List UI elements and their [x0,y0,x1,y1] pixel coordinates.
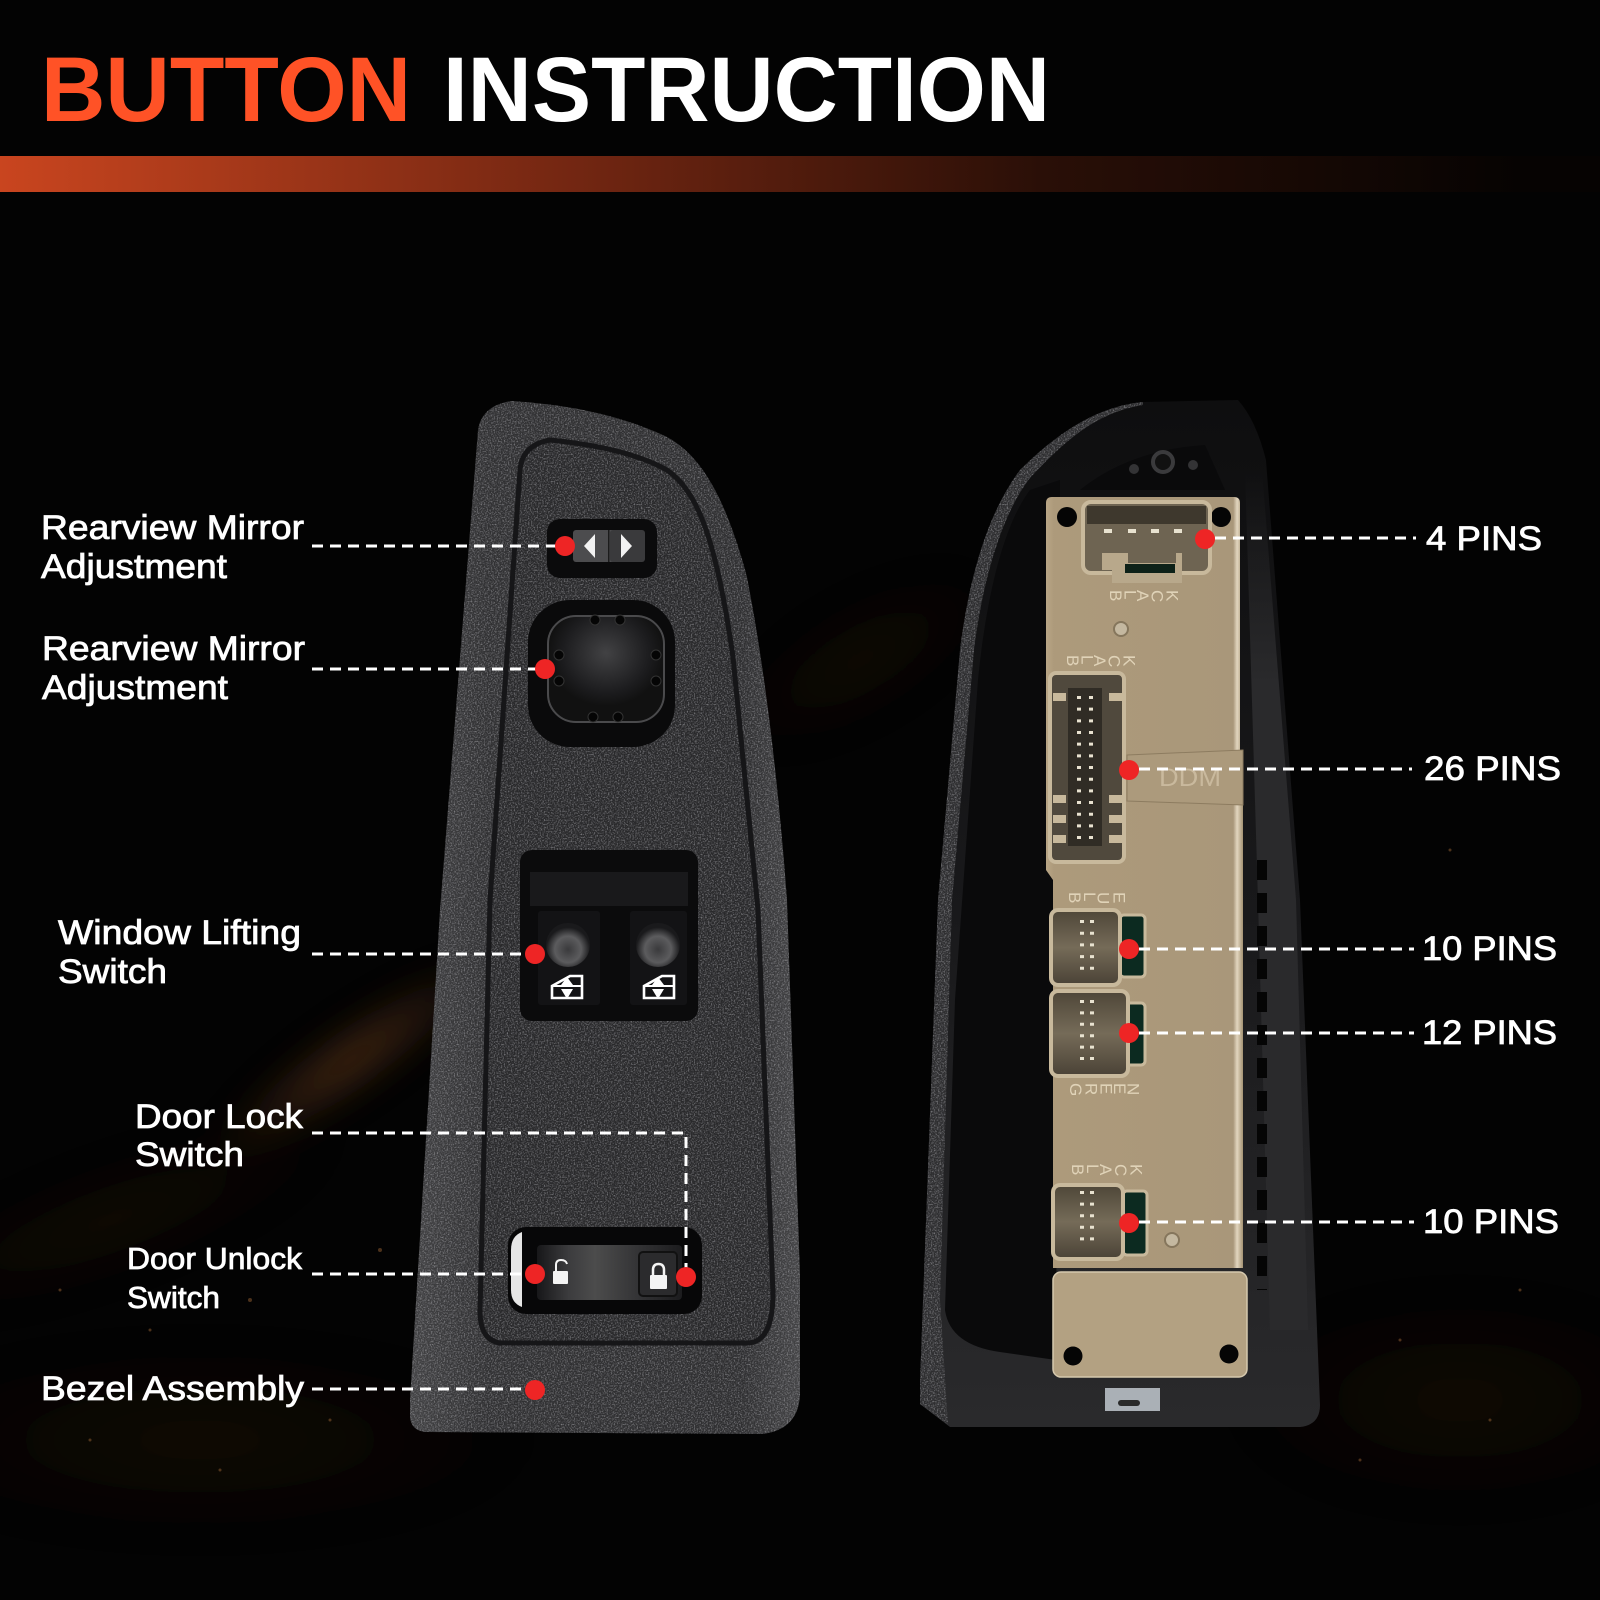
panel: back of switch [920,400,1320,1427]
title: BUTTON [41,39,411,141]
icon: window up down left [552,976,582,998]
callout: door unlock switch: Switch [127,1280,220,1315]
door lock switch [508,1227,702,1314]
callout: door lock switch: Door Lock [135,1098,304,1136]
panel: front of switch [410,401,800,1434]
callout: rearview mirror adjustment 1: Rearview Mirror [41,509,304,547]
textured rim [920,402,1143,1425]
callout: window lifting switch: Switch [58,953,167,991]
callout: 10 pins upper [1119,930,1557,968]
moulded colour labels: GREEN [1066,1083,1143,1096]
housing [920,400,1320,1427]
title gradient bar [0,156,1600,192]
callout: window lifting switch: Window Lifting [58,914,301,952]
DDM band: DDM [1159,764,1221,792]
mirror joystick [528,600,675,747]
callout: bezel assembly: Bezel Assembly [41,1370,304,1408]
callout: 4 pins: 4 PINS [1426,520,1542,558]
window lifting switches [520,850,698,1021]
callout: door lock switch [135,1098,696,1287]
DDM band [1127,750,1243,805]
right side wall [1245,470,1308,1330]
icon: window up down right [644,976,674,998]
connector: 10 pins upper [1051,910,1145,985]
callout: rearview mirror adjustment 1 [41,509,575,586]
callout: rearview mirror adjustment 2: Rearview Mirror [42,630,305,668]
callout: 12 pins: 12 PINS [1422,1014,1557,1052]
callout: 10 pins lower: 10 PINS [1423,1203,1559,1241]
bezel body [410,401,800,1434]
callout: rearview mirror adjustment 2: Adjustment [42,669,229,707]
moulded colour labels [1063,590,1182,1176]
icon: closed padlock [650,1264,667,1289]
icon: open padlock [553,1260,568,1284]
callout: rearview mirror adjustment 1: Adjustment [41,548,228,586]
connector: 26 pins [1050,673,1124,862]
connector: 10 pins lower [1053,1185,1147,1259]
callout: door unlock switch [127,1241,545,1315]
connector: 4 pins [1083,502,1210,583]
callout: bezel assembly [41,1370,545,1408]
inner cavity [945,480,1060,1360]
callout: door lock switch: Switch [135,1136,244,1174]
title [41,39,1050,141]
title: INSTRUCTION [443,39,1050,141]
callout: 26 pins: 26 PINS [1424,750,1561,788]
metal clip [1105,1388,1160,1411]
connector: 12 pins [1051,991,1145,1076]
callout: 10 pins upper: 10 PINS [1422,930,1557,968]
moulded colour labels: BLACK [1068,1164,1146,1176]
recessed face [480,440,773,1343]
recess rim [480,440,773,1343]
callout: rearview mirror adjustment 2 [42,630,555,707]
callout: 4 pins [1195,520,1542,558]
callout: door unlock switch: Door Unlock [127,1241,303,1276]
callout: 10 pins lower [1119,1203,1559,1241]
mirror selector switch [547,519,657,578]
callout: 26 pins [1119,750,1561,788]
callout: window lifting switch [58,914,545,991]
moulded colour labels: BLUE [1065,892,1129,904]
moulded colour labels: BLACK [1106,590,1182,602]
tan circuit board [1046,497,1247,1377]
bottom cover [1053,1272,1247,1377]
vent slots [1257,860,1267,1290]
top mount [1080,445,1225,490]
moulded colour labels: BLACK [1063,655,1139,667]
callout: 12 pins [1119,1014,1557,1052]
